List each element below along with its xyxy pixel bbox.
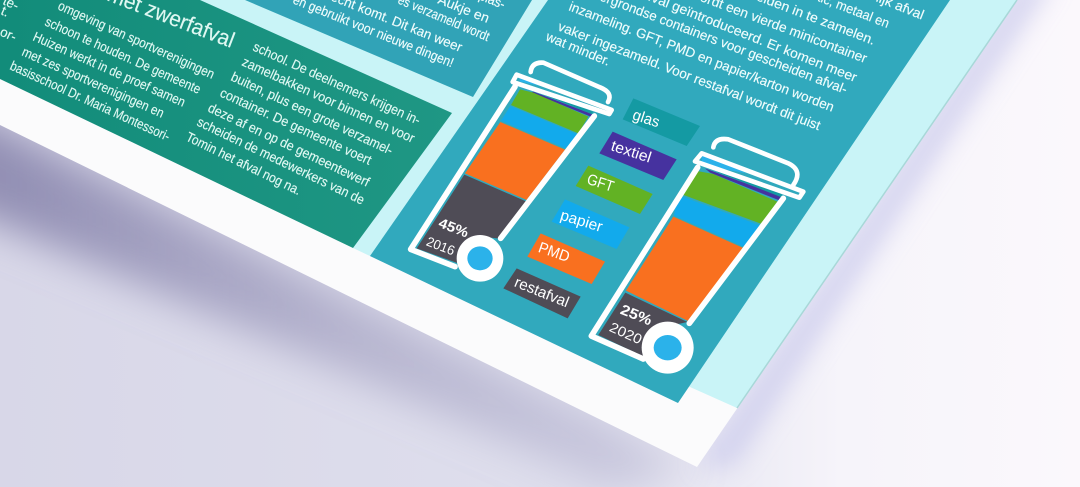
legend: papier: papier bbox=[558, 207, 605, 236]
legend: GFT bbox=[576, 166, 653, 214]
legend: glas bbox=[623, 98, 700, 146]
legend: PMD bbox=[527, 233, 605, 284]
text column right: container. De gemeente voert bbox=[218, 85, 374, 168]
value 45%: 45% bbox=[437, 215, 472, 241]
legend: textiel: textiel bbox=[609, 138, 653, 167]
panel: zwerfafval bbox=[0, 0, 452, 248]
bin 2020 bbox=[591, 139, 803, 374]
text block: vaker ingezameld. Voor restafval wordt dit juist bbox=[556, 19, 823, 133]
text column left: schoon te houden. De gemeente bbox=[43, 14, 203, 97]
wheel bbox=[642, 322, 694, 374]
text column right bbox=[184, 39, 423, 207]
year 2020: 2020 bbox=[607, 319, 645, 347]
bin 2016 bbox=[411, 63, 612, 282]
text column right: zamelbakken voor binnen en voor bbox=[240, 54, 417, 146]
text column right: school. De deelnemers krijgen in- bbox=[251, 39, 423, 128]
light blue page area bbox=[200, 0, 1017, 408]
legend: restafval bbox=[503, 268, 581, 318]
text column left: basisschool Dr. Maria Montessori- bbox=[8, 58, 172, 144]
panel: top teal text bbox=[245, 0, 532, 97]
legend: glas: glas bbox=[630, 107, 662, 131]
legend bbox=[503, 98, 700, 318]
panel: afval containers bbox=[370, 0, 950, 403]
text column left bbox=[0, 0, 217, 144]
text column left: omgeving van sportverenigingen bbox=[56, 0, 217, 82]
text column right: Tomin het afval nog na. bbox=[184, 129, 304, 198]
text column right: deze af en op de gemeentewerf bbox=[206, 100, 372, 190]
year 2016: 2016 bbox=[424, 234, 457, 258]
text block: inzameling. GFT, PMD en papier/karton worden bbox=[567, 0, 836, 115]
text column right: buiten, plus een grote verzamel- bbox=[229, 69, 395, 158]
text column left: Huizen werkt in de proef samen bbox=[31, 29, 188, 110]
text block: wat minder. bbox=[543, 29, 612, 69]
legend: papier bbox=[552, 199, 629, 249]
legend: restafval: restafval bbox=[512, 274, 571, 311]
wheel bbox=[457, 235, 503, 282]
value 25%: 25% bbox=[618, 302, 654, 329]
legend: GFT: GFT bbox=[585, 171, 617, 196]
legend: textiel bbox=[599, 132, 677, 180]
legend: PMD: PMD bbox=[536, 239, 572, 266]
text block bbox=[543, 0, 926, 133]
text column right: scheiden de medewerkers van de bbox=[195, 114, 367, 207]
text column left: met zes sportverenigingen en bbox=[20, 44, 166, 121]
